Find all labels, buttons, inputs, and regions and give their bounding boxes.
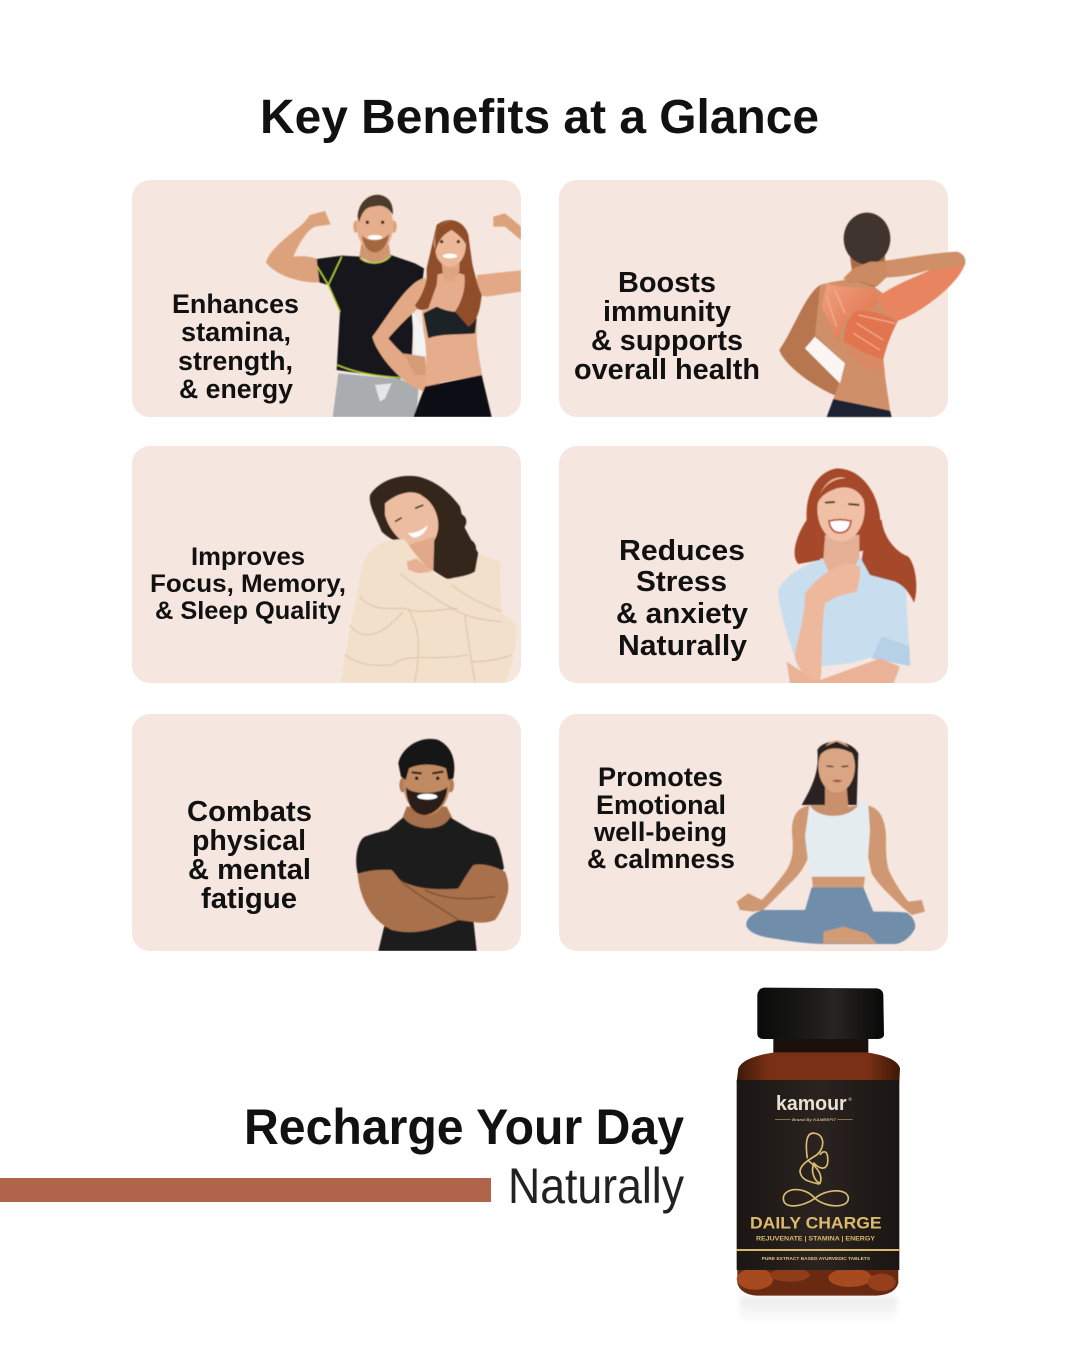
text: stress benefit: & anxiety	[616, 598, 748, 630]
panel: focus, memory and sleep	[132, 446, 521, 683]
product: Kamour Daily Charge bottle: REJUVENATE | STAMINA | ENERGY	[756, 1236, 876, 1243]
text: immunity benefit: immunity	[603, 296, 731, 328]
panel: stress and anxiety	[559, 446, 948, 684]
product: Kamour Daily Charge bottle	[737, 988, 900, 1323]
text: fatigue benefit: Combats	[187, 796, 312, 828]
text: stress benefit: Naturally	[618, 630, 747, 662]
text: stamina benefit: strength,	[178, 346, 293, 376]
text: stress benefit	[616, 535, 748, 662]
text: focus benefit: Focus, Memory,	[150, 570, 346, 598]
text: focus benefit: Improves	[191, 543, 305, 571]
panel: physical and mental fatigue	[132, 714, 521, 951]
text: fatigue benefit: physical	[192, 825, 306, 857]
photo: woman meditating cross-legged	[737, 741, 925, 944]
tagline: Recharge Your Day Naturally: Naturally	[508, 1158, 684, 1214]
photo: fit man and woman flexing	[266, 195, 521, 417]
text: focus benefit: & Sleep Quality	[155, 597, 341, 625]
product: Kamour Daily Charge bottle: kamour	[776, 1092, 847, 1115]
text: well-being benefit	[587, 762, 735, 874]
text: immunity benefit	[574, 267, 760, 386]
product: Kamour Daily Charge bottle: DAILY CHARGE	[750, 1213, 882, 1232]
text: fatigue benefit	[187, 796, 312, 915]
text: stamina benefit: Enhances	[172, 289, 299, 319]
text: stamina benefit: & energy	[179, 374, 293, 404]
text: stress benefit: Stress	[636, 566, 727, 598]
panel: emotional well-being	[559, 714, 948, 951]
text: immunity benefit: & supports	[591, 325, 743, 357]
text: focus benefit	[150, 543, 346, 625]
product: Kamour Daily Charge bottle: PURE EXTRACT BASED AYURVEDIC TABLETS	[762, 1256, 870, 1261]
text: fatigue benefit: fatigue	[201, 883, 297, 915]
photo: man's back with muscles highlighted	[779, 213, 965, 417]
product: Kamour Daily Charge bottle: Brand By KAMEEFIT	[792, 1117, 837, 1122]
text: well-being benefit: well-being	[593, 817, 727, 847]
tagline: Recharge Your Day Naturally: Recharge Your Day	[244, 1099, 684, 1155]
text: stamina benefit: stamina,	[181, 317, 291, 347]
product: Kamour Daily Charge bottle: ®	[848, 1096, 852, 1102]
text: fatigue benefit: & mental	[188, 854, 311, 886]
text: immunity benefit: Boosts	[618, 267, 716, 299]
text: stamina benefit	[172, 289, 299, 404]
photo: smiling man with crossed arms	[356, 739, 508, 951]
panel: stamina, strength and energy	[132, 180, 521, 417]
title: Key Benefits at a Glance	[260, 91, 819, 144]
photo: laughing red-haired woman in blue shirt	[778, 468, 916, 684]
text: well-being benefit: Promotes	[598, 762, 723, 792]
panel: immunity and overall health	[559, 180, 965, 417]
accent bar	[0, 1178, 491, 1202]
text: well-being benefit: & calmness	[587, 844, 735, 874]
text: immunity benefit: overall health	[574, 354, 760, 386]
text: stress benefit: Reduces	[619, 535, 745, 567]
text: well-being benefit: Emotional	[596, 790, 726, 820]
photo: woman wrapped in a blanket	[341, 476, 517, 682]
tagline: Recharge Your Day Naturally	[244, 1099, 684, 1214]
